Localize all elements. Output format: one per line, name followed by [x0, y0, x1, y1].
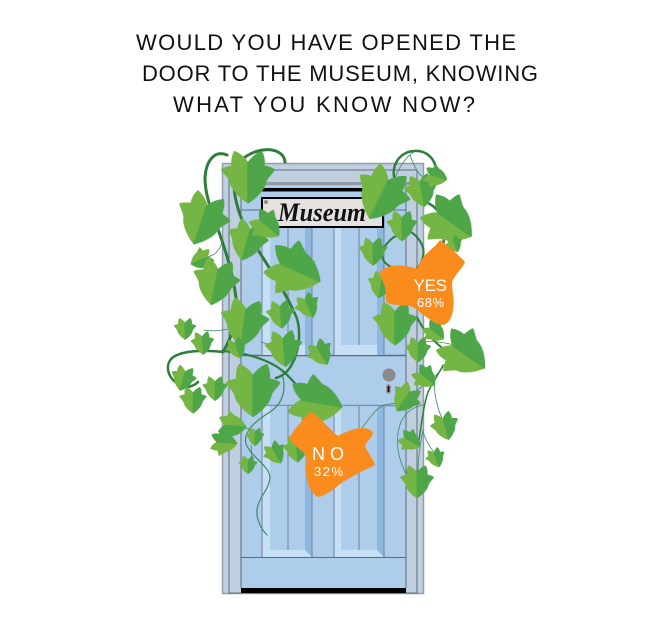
door knob [382, 368, 396, 382]
title [136, 30, 538, 117]
thin wavy stem [246, 377, 284, 535]
ivy vines [168, 150, 455, 535]
title: DOOR TO THE MUSEUM, KNOWING [142, 61, 538, 86]
orange leaf: yes 68% [380, 240, 465, 325]
no percentage: 32% [314, 464, 343, 479]
orange leaf: no 32% [289, 412, 375, 497]
door leaf [241, 185, 406, 588]
no label: NO [312, 444, 344, 464]
title: WOULD YOU HAVE OPENED THE [136, 30, 516, 55]
door top rail and rails [241, 185, 406, 588]
middle arching vine [222, 351, 309, 400]
thin right stems [204, 152, 455, 474]
looping tendril [168, 351, 223, 387]
museum sign [259, 188, 386, 227]
left thick vine [234, 150, 293, 310]
door threshold [241, 588, 406, 593]
keyhole [386, 384, 391, 394]
yes percentage: 68% [417, 295, 444, 310]
right lower vine [417, 317, 441, 347]
outer left vine [205, 154, 237, 352]
lower right panel [334, 406, 384, 557]
door [222, 164, 424, 594]
museum sign: Museum [277, 198, 366, 227]
lower left panel [262, 406, 312, 557]
right top vine [394, 151, 436, 184]
door frame [222, 164, 424, 594]
ivy leaves [168, 152, 500, 499]
yes label: YES [414, 276, 447, 295]
title: WHAT YOU KNOW NOW? [173, 92, 475, 117]
upper right panel [334, 211, 384, 355]
upper left panel [262, 211, 312, 355]
right inner tendril [405, 230, 424, 268]
